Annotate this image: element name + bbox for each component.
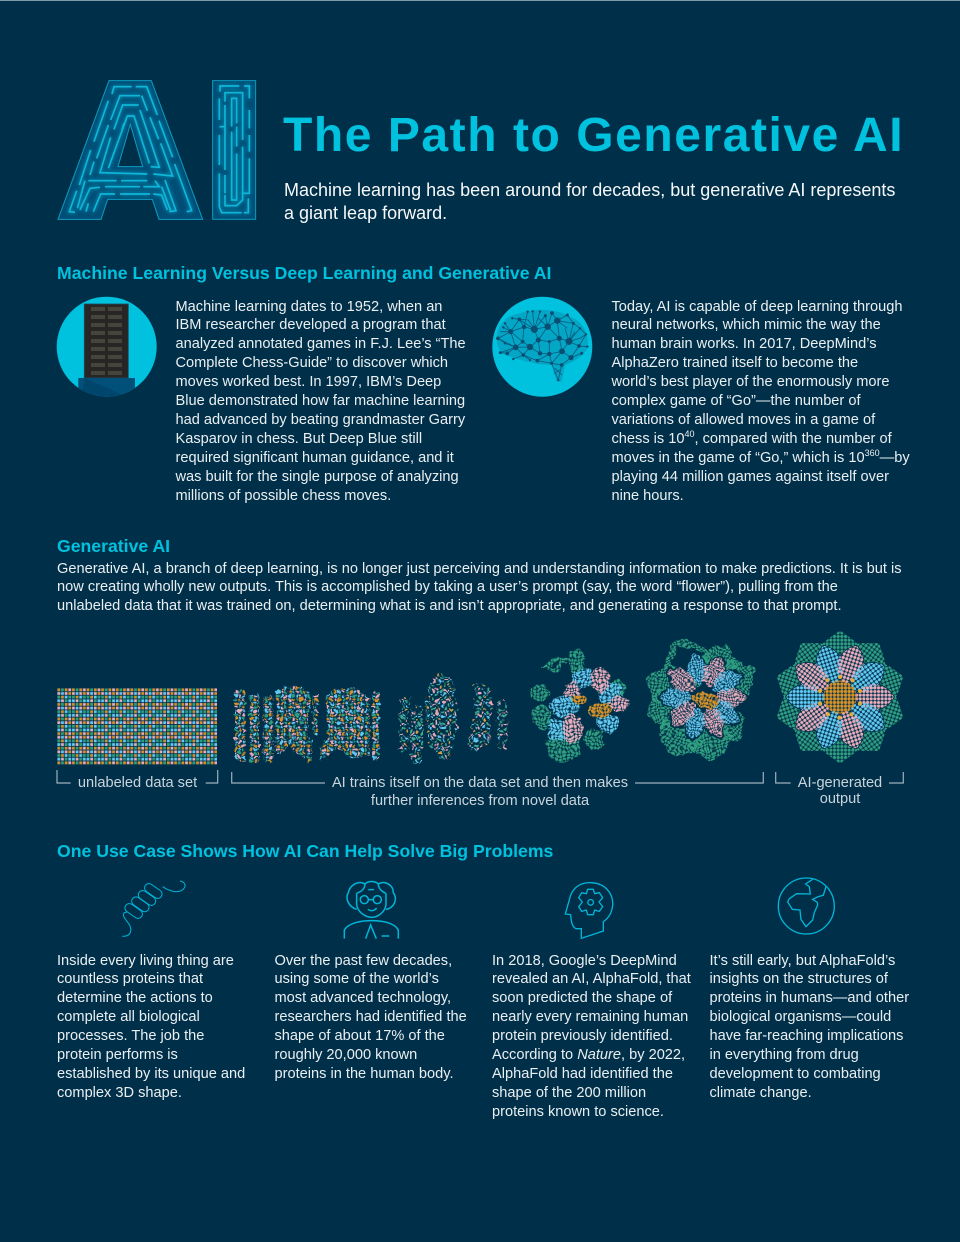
text: past decades: Over the past few decades, [274,952,452,968]
text: implications [710,952,909,1101]
text: AlphaFold: shape of the 200 million [492,1085,646,1101]
text: proteins: Inside every living thing are [57,952,234,968]
text: AlphaFold: revealed an AI, AlphaFold, that [492,971,691,987]
label: AI trains itself [332,775,628,809]
text: implications: in everything from drug [710,1047,859,1063]
label: AI-generated output: AI-generated [798,775,882,791]
chart stage: generated flower [770,630,910,764]
chart stage: flower emerging [530,649,629,762]
text: machine learning history: IBM researcher developed a program that [176,317,446,333]
text: deep learning: AlphaZero trained itself to become the [612,355,858,371]
text: AlphaFold: AlphaFold had identified the [492,1066,673,1082]
text: machine learning history: analyzed annotated games in F.J. Lee’s “The [176,336,466,352]
text: past decades [274,952,467,1082]
text: proteins: established by its unique and [57,1066,245,1082]
text: past decades: most advanced technology, [274,990,451,1006]
label: AI-generated output [798,775,882,807]
text: deep learning: playing 44 million games against itself over [612,469,889,485]
text: machine learning history: required significant human guidance, and it [176,450,454,466]
text: proteins: processes. The job the [57,1028,204,1044]
text: proteins [57,952,245,1101]
text: past decades: researchers had identified the [274,1009,467,1025]
text: deep learning: nine hours. [612,488,684,504]
text: proteins: protein performs is [57,1047,178,1063]
icon: scientist [344,881,398,939]
text: proteins: complex 3D shape. [57,1085,182,1101]
text: AlphaFold: proteins known to science. [492,1104,664,1120]
text: deep learning: complex game of “Go”—the number of [612,393,861,409]
text: generative AI: now creating wholly new outputs. This is accomplished by taking a user’s prompt (say, the word “flower”), pulling from the [57,579,838,595]
text: machine learning history: moves worked best. In 1997, IBM’s Deep [176,374,441,390]
text: implications: It’s still early, but AlphaFold’s [710,952,895,968]
text: deep learning: chess is 1040, compared with the number of [612,429,892,447]
chart stage: unlabeled data grid [57,688,217,765]
icon: protein helix [122,881,185,936]
text: machine learning history: millions of possible chess moves. [176,488,391,504]
text: deep learning [612,298,910,504]
text: proteins: determine the actions to [57,990,213,1006]
icon: head with gear [565,883,613,938]
top edge line [0,0,960,1]
text: deep learning: neural networks, which mimic the way the [612,317,881,333]
text: deep learning: world’s best player of the enormously more [612,374,889,390]
text: machine learning history: was built for the single purpose of analyzing [176,469,459,485]
text: implications: have far-reaching implications [710,1028,903,1044]
text: generative AI: unlabeled data that it was trained on, determining what is and isn’t appropriate, and generating a response to that prompt. [57,598,842,614]
text: proteins: countless proteins that [57,971,203,987]
text: AlphaFold: protein previously identified. [492,1028,673,1044]
text: implications: climate change. [710,1085,812,1101]
text: implications: insights on the structures of [710,971,888,987]
text: machine learning history: Complete Chess-Guide” to discover which [176,355,448,371]
text: machine learning history: Machine learning dates to 1952, when an [176,298,442,314]
text: AlphaFold: soon predicted the shape of [492,990,672,1006]
icon: globe [778,878,834,934]
text: deep learning: moves in the game of “Go,” which is 10360—by [612,448,910,466]
heading: use case: One Use Case Shows How AI Can Help Solve Big Problems [57,840,553,860]
logo: maze AI [58,81,256,219]
heading: machine learning: Machine Learning Versus Deep Learning and Generative AI [57,262,551,282]
text: AlphaFold: nearly every remaining human [492,1009,688,1025]
intro text [284,180,895,223]
chart stage: flower refining [639,634,764,767]
icon: neural brain [492,297,592,397]
text: past decades: using some of the world’s [274,971,439,987]
label: unlabeled data set: unlabeled data set [78,775,197,791]
text: past decades: proteins in the human body. [274,1066,454,1082]
text: machine learning history: Blue demonstrated how far machine learning [176,393,465,409]
text: generative AI: Generative AI, a branch of deep learning, is no longer just perceiving and understanding information to make predictions. It is but is [57,560,902,576]
chart stage: mixed clusters [399,674,507,763]
text: proteins: complete all biological [57,1009,200,1025]
text: deep learning: Today, AI is capable of deep learning through [612,298,902,314]
text: generative AI [57,560,902,614]
label: AI trains itself: further inferences from novel data [371,793,589,809]
text: AlphaFold [492,952,691,1120]
text: machine learning history: Kasparov in chess. But Deep Blue still [176,431,422,447]
chart stage: columns forming [235,686,379,763]
text: machine learning history: had advanced by beating grandmaster Garry [176,412,465,428]
intro text: a giant leap forward. [284,203,447,223]
heading: generative AI: Generative AI [57,536,170,556]
icon: supercomputer tower [56,296,157,397]
text: AlphaFold: In 2018, Google’s DeepMind [492,952,677,968]
label: AI-generated output: output [820,791,860,807]
text: past decades: roughly 20,000 known [274,1047,417,1063]
text: implications: development to combating [710,1066,881,1082]
label: AI trains itself: AI trains itself on the data set and then makes [332,775,628,791]
text: implications: biological organisms—could [710,1009,891,1025]
text: deep learning: human brain works. In 2017, DeepMind’s [612,336,876,352]
brackets: data flow labels [57,770,903,783]
text: implications: proteins in humans—and other [710,990,909,1006]
graphics layer [0,0,960,940]
text: deep learning: variations of allowed moves in a game of [612,412,875,428]
text: past decades: shape of about 17% of the [274,1028,445,1044]
text: AlphaFold: According to Nature, by 2022, [492,1047,685,1063]
title: The Path to Generative AI [283,109,904,162]
text: machine learning history [176,298,466,504]
intro text: Machine learning has been around for decades, but generative AI represents [284,180,895,200]
